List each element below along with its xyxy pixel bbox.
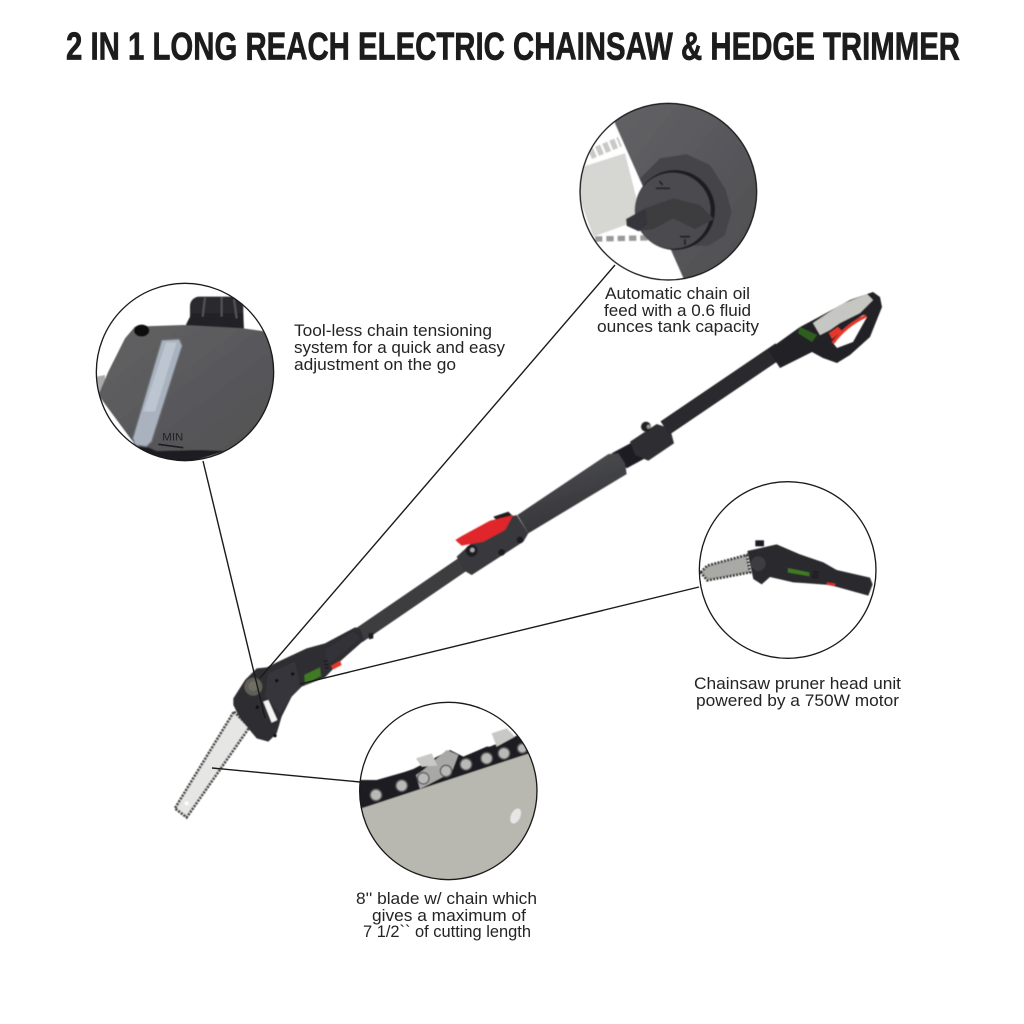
housing (100, 324, 273, 452)
text: tensioning caption: Tool-less chain tensioning (294, 321, 492, 340)
product: pole chainsaw (175, 292, 882, 817)
bar (701, 555, 750, 580)
clamp and foam grip (455, 422, 674, 575)
red lever (455, 515, 513, 546)
body (747, 544, 873, 596)
MIN mark: MIN (162, 432, 183, 444)
housing (614, 104, 756, 278)
text: blade caption (356, 889, 537, 941)
text: oil feed caption: Automatic chain oil (605, 284, 750, 303)
text: oil feed caption: feed with a 0.6 fluid (604, 301, 751, 320)
text: oil feed caption: ounces tank capacity (597, 317, 760, 336)
panel: oil feed cap (579, 102, 758, 281)
text: oil feed caption (597, 284, 760, 336)
panel: pruner head unit (699, 482, 876, 658)
text: head unit caption: powered by a 750W motor (696, 691, 899, 710)
chain and bar (580, 153, 636, 237)
text: tensioning caption: system for a quick and easy (294, 338, 505, 357)
knob (640, 154, 732, 246)
text: head unit caption: Chainsaw pruner head unit (694, 674, 901, 693)
motor head (233, 627, 373, 742)
tension knob (190, 297, 243, 330)
text: tensioning caption (294, 321, 505, 374)
panel: chain tensioning (96, 283, 280, 463)
text: head unit caption (694, 674, 901, 710)
text: tensioning caption: adjustment on the go (294, 355, 456, 374)
text: blade caption: 8'' blade w/ chain which (356, 889, 537, 908)
text: blade caption: gives a maximum of (372, 906, 526, 925)
callout lines (203, 265, 699, 782)
upper tube (665, 350, 780, 428)
panel: blade and chain (359, 702, 538, 880)
rear handle (768, 292, 882, 368)
lower tube (358, 558, 472, 636)
bar hole (510, 808, 522, 824)
chain links (360, 735, 528, 809)
chainsaw bar (175, 712, 249, 817)
text: blade caption: 7 1/2`` of cutting length (363, 922, 531, 941)
sight window (133, 339, 182, 447)
